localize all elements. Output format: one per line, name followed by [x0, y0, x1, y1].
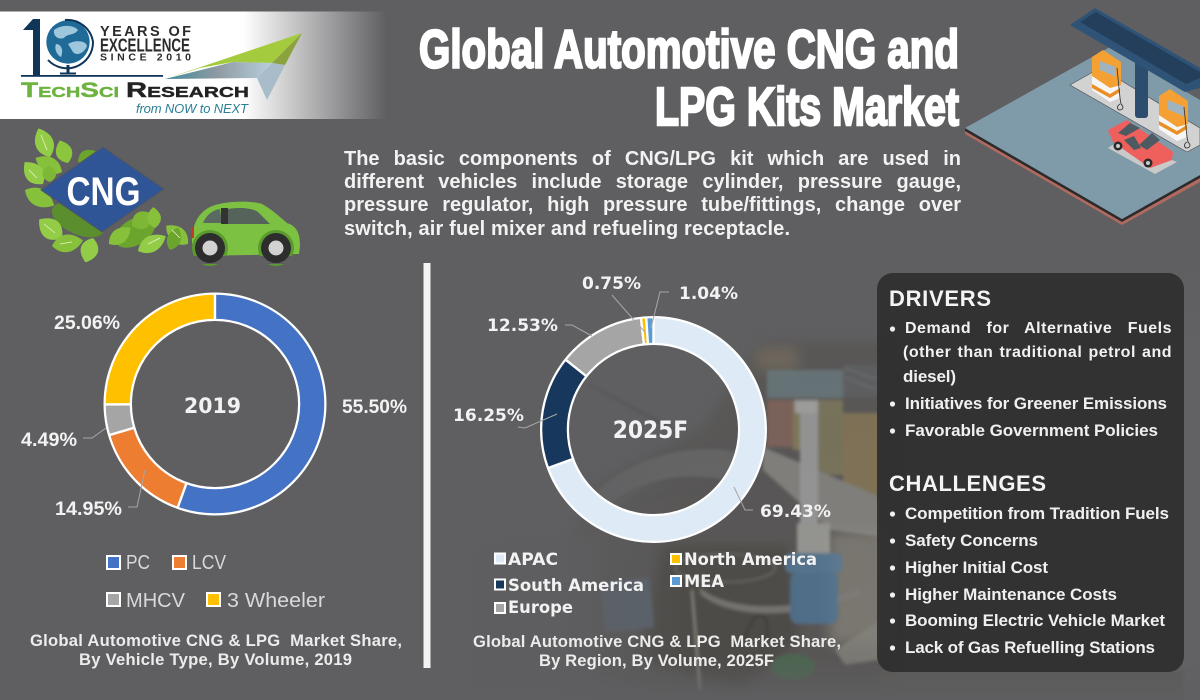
divider: [424, 263, 430, 668]
description paragraph: pressure regulator, high pressure tube/fittings, change over: [344, 194, 961, 216]
challenges list: Competition from Tradition Fuels: [905, 504, 1169, 523]
title: Global Automotive CNG and: [419, 20, 959, 80]
legend: vehicle type: [107, 551, 325, 612]
kit and steel parts: [767, 400, 793, 447]
driver item: alternative fuels: [903, 320, 1172, 361]
description paragraph: The basic components of CNG/LPG kit which are used in: [344, 148, 961, 170]
challenges list: Lack of Gas Refuelling Stations: [905, 638, 1155, 657]
legend: vehicle type: LCV: [192, 551, 226, 574]
heading: drivers: DRIVERS: [889, 286, 991, 311]
value labels: 12.53%: [487, 316, 558, 335]
value labels: 4.49%: [21, 430, 77, 451]
leaf veins: [29, 135, 180, 244]
logo: paper plane swoosh: [165, 33, 302, 100]
caption: region: Global Automotive CNG & LPG Market Share,: [473, 632, 841, 651]
icon: isometric gas station: [965, 8, 1200, 225]
CNG diamond: CNG: [66, 170, 140, 214]
leaves: [18, 125, 193, 265]
legend: vehicle type: 3 Wheeler: [227, 589, 325, 612]
panel: drivers and challenges: [877, 273, 1184, 672]
challenges list: Safety Concerns: [905, 531, 1038, 550]
logo: TechSci Research wordmark: [21, 79, 249, 116]
driver item: alternative fuels: Demand for Alternative Fuels: [905, 320, 1172, 336]
value labels: 0.75%: [582, 274, 641, 293]
legend: vehicle type: PC: [126, 551, 150, 574]
value labels: 1.04%: [679, 284, 738, 303]
CNG diamond: [41, 147, 164, 232]
caption: vehicle type: Global Automotive CNG & LPG Market Share,: [30, 631, 402, 650]
background photo: engine bay with gas kit: [430, 260, 1200, 700]
legend: region: North America: [684, 550, 817, 569]
legend: region: South America: [508, 576, 644, 595]
value labels: 55.50%: [342, 397, 407, 418]
donut chart: by region 2025F: [453, 274, 831, 528]
drivers list: Initiatives for Greener Emissions: [905, 394, 1167, 413]
logo: TechSci Research wordmark: from NOW to NEXT: [136, 101, 249, 116]
logo: ten years mark with globe: EXCELLENCE: [100, 36, 190, 56]
logo: ten years mark with globe: YEARS OF: [100, 24, 191, 40]
caption: region: [473, 632, 841, 670]
legend: region: APAC: [508, 550, 558, 569]
driver item: alternative fuels: (other than traditional petrol and: [903, 344, 1172, 361]
challenges list: Higher Initial Cost: [905, 558, 1048, 577]
heading: challenges: CHALLENGES: [889, 471, 1046, 496]
caption: vehicle type: By Vehicle Type, By Volume, 2019: [79, 650, 352, 669]
pump 2: [1159, 89, 1190, 148]
legend: region: Europe: [508, 598, 573, 617]
value labels: 25.06%: [54, 313, 120, 334]
legend: vehicle type: MHCV: [126, 589, 185, 612]
donut slices: [554, 330, 752, 528]
logo: ten years mark with globe: SINCE 2010: [100, 52, 191, 64]
logo: TechSci Research wordmark: R ESEARCH: [126, 79, 249, 102]
legend: region: MEA: [684, 572, 724, 591]
logo: ten years mark with globe: [21, 19, 191, 77]
title: [419, 20, 959, 137]
icon: CNG diamond with leaves and green car: [18, 125, 302, 266]
red car: [1108, 120, 1177, 174]
value labels: 16.25%: [453, 406, 524, 425]
challenges list: [890, 504, 1169, 657]
leader lines: [83, 428, 145, 507]
pump 1: [1092, 50, 1123, 110]
value labels: 14.95%: [55, 499, 122, 520]
drivers list: Favorable Government Policies: [905, 421, 1158, 440]
value labels: [453, 274, 831, 521]
description paragraph: different vehicles include storage cylinder, pressure gauge,: [344, 171, 961, 193]
legend: region: [495, 550, 817, 617]
caption: vehicle type: [30, 631, 402, 669]
drivers list: diesel): [903, 367, 956, 386]
title: LPG Kits Market: [655, 77, 959, 137]
canopy and post: [1070, 8, 1200, 118]
paragraph last line: switch, air fuel mixer and refueling receptacle.: [344, 218, 790, 240]
shapes in the donut hole: [585, 449, 736, 515]
challenges list: Higher Maintenance Costs: [905, 585, 1117, 604]
station ground: [965, 47, 1200, 225]
donut slices: [118, 307, 312, 501]
description paragraph: [344, 148, 961, 216]
caption: region: By Region, By Volume, 2025F: [539, 651, 774, 670]
centre year: 2025F: [613, 416, 688, 444]
value labels: 69.43%: [760, 502, 831, 521]
leader lines: [518, 292, 753, 510]
value labels: [21, 313, 407, 520]
logo band: [0, 12, 386, 119]
centre year: 2019: [184, 394, 241, 418]
donut chart: by vehicle type 2019: [21, 293, 407, 520]
logo: TechSci Research wordmark: T ECH S CI: [21, 79, 119, 102]
green car: [190, 202, 302, 266]
challenges list: Booming Electric Vehicle Market: [905, 611, 1165, 630]
drivers list: [890, 326, 1167, 440]
